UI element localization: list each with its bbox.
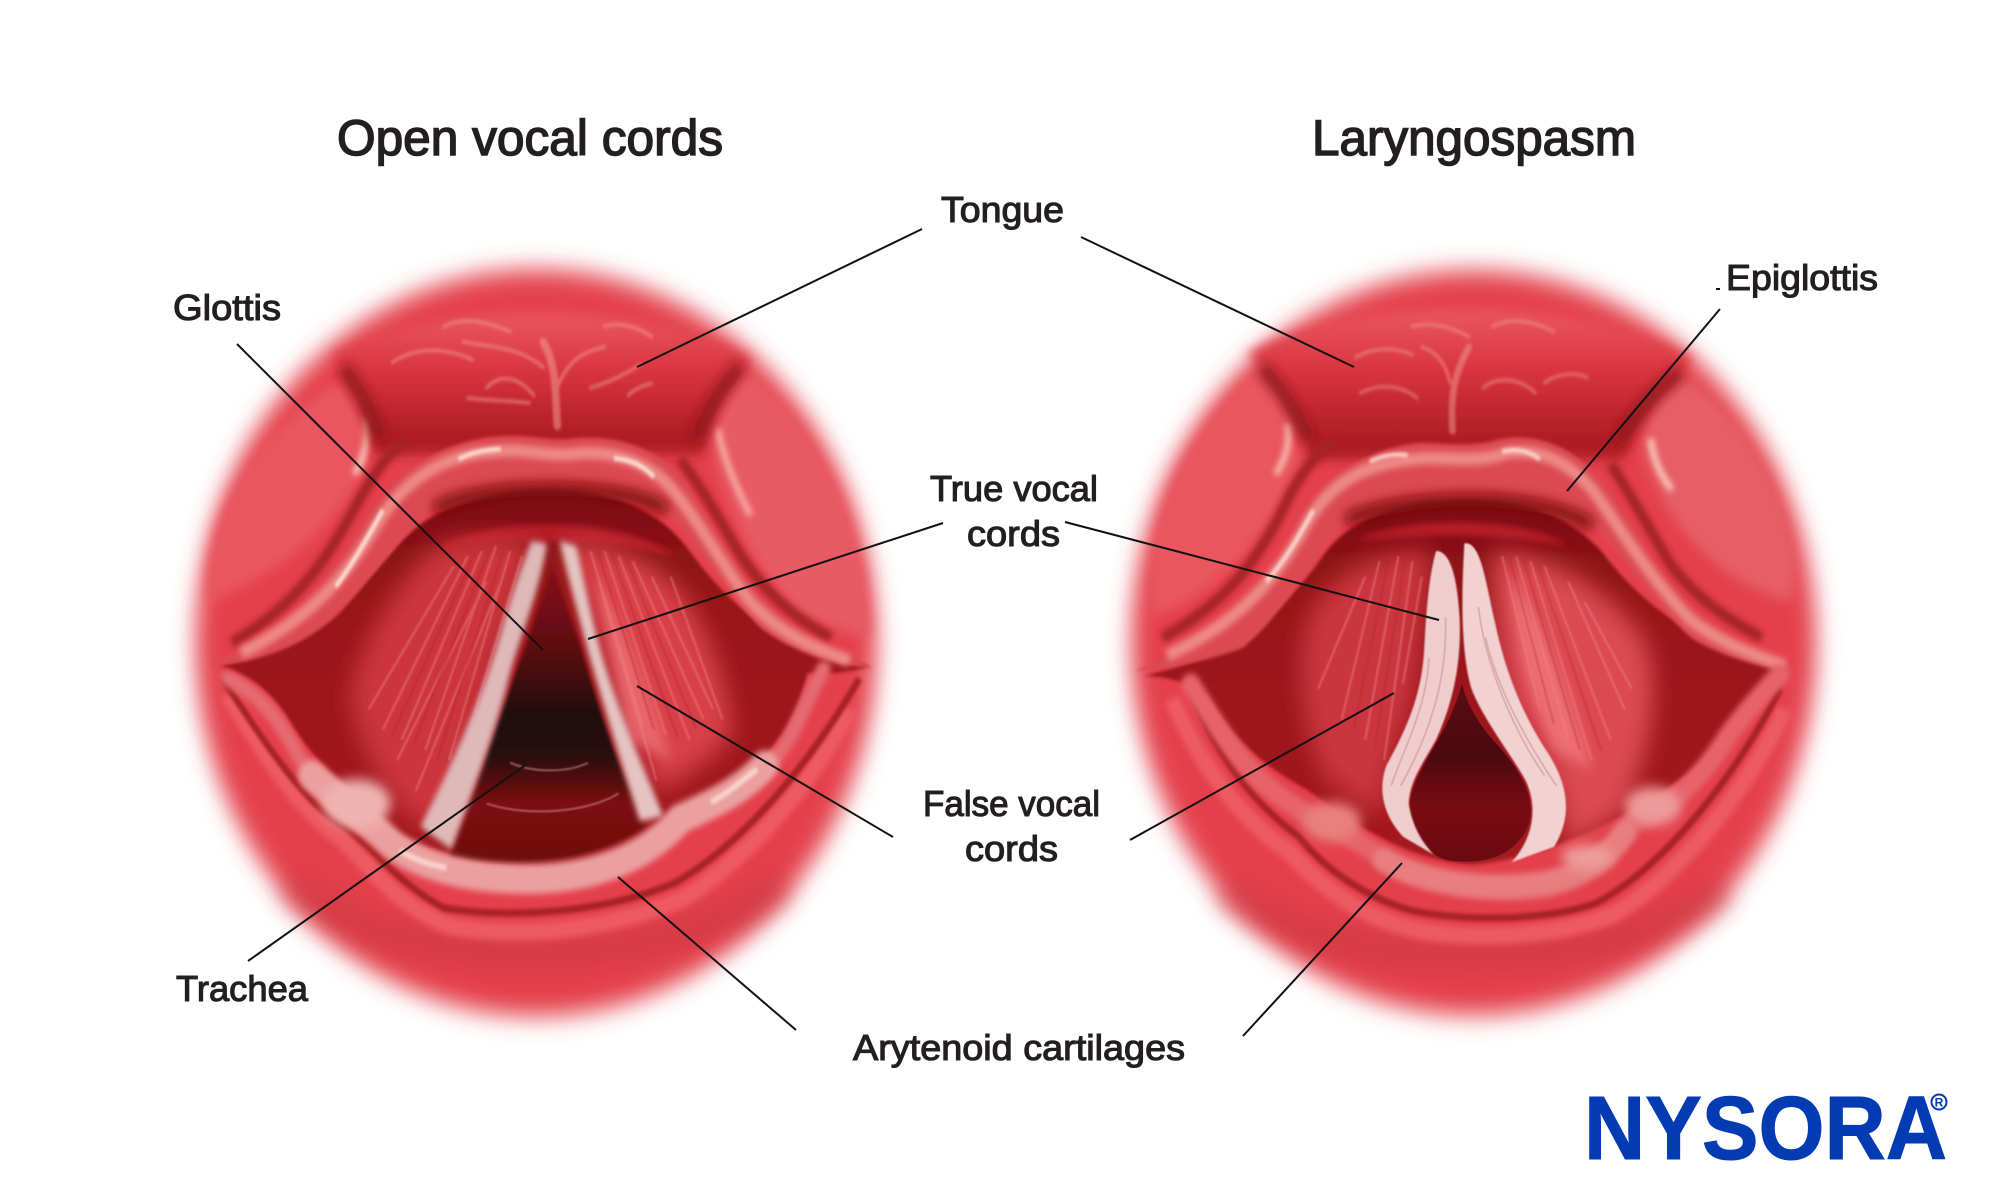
label: Tongue: Tongue <box>941 189 1064 230</box>
illustration: open vocal cords larynx <box>196 269 877 1016</box>
glottis opening <box>449 566 647 863</box>
lower crease <box>1172 689 1785 936</box>
tongue texture <box>1356 321 1587 431</box>
label: Epiglottis: Epiglottis <box>1726 257 1878 298</box>
glottis opening <box>1410 684 1531 862</box>
true vocal cords <box>1382 551 1460 855</box>
label: Glottis: Glottis <box>173 287 281 328</box>
label: True vocal cords: True vocal <box>930 468 1098 509</box>
label: False vocal cords: False vocal <box>923 783 1100 824</box>
leader lines <box>237 229 1720 1036</box>
epiglottis band <box>1134 437 1799 671</box>
arytenoid cartilages <box>227 668 824 879</box>
false vocal cords <box>1301 551 1431 814</box>
title: Laryngospasm: Laryngospasm <box>1312 110 1636 166</box>
tongue texture <box>392 321 652 426</box>
true vocal cords <box>421 541 547 849</box>
label: Trachea: Trachea <box>176 968 309 1009</box>
illustration: laryngospasm larynx <box>1131 270 1816 1015</box>
label: True vocal cords <box>930 468 1098 554</box>
logo: NYSORA: NYSORA <box>1584 1079 1947 1179</box>
arytenoid cartilages <box>1191 673 1780 890</box>
label: Arytenoid cartilages: Arytenoid cartilages <box>853 1027 1185 1068</box>
label: False vocal cords <box>923 783 1100 869</box>
label: True vocal cords: cords <box>967 513 1060 554</box>
lower crease <box>222 679 859 932</box>
logo: NYSORA: R <box>1935 1096 1944 1110</box>
false vocal cords <box>350 538 534 827</box>
title: Open vocal cords: Open vocal cords <box>337 110 723 166</box>
epiglottis band <box>208 436 873 668</box>
inner cavity <box>220 490 869 867</box>
inner cavity <box>1144 500 1790 865</box>
label: False vocal cords: cords <box>965 828 1058 869</box>
